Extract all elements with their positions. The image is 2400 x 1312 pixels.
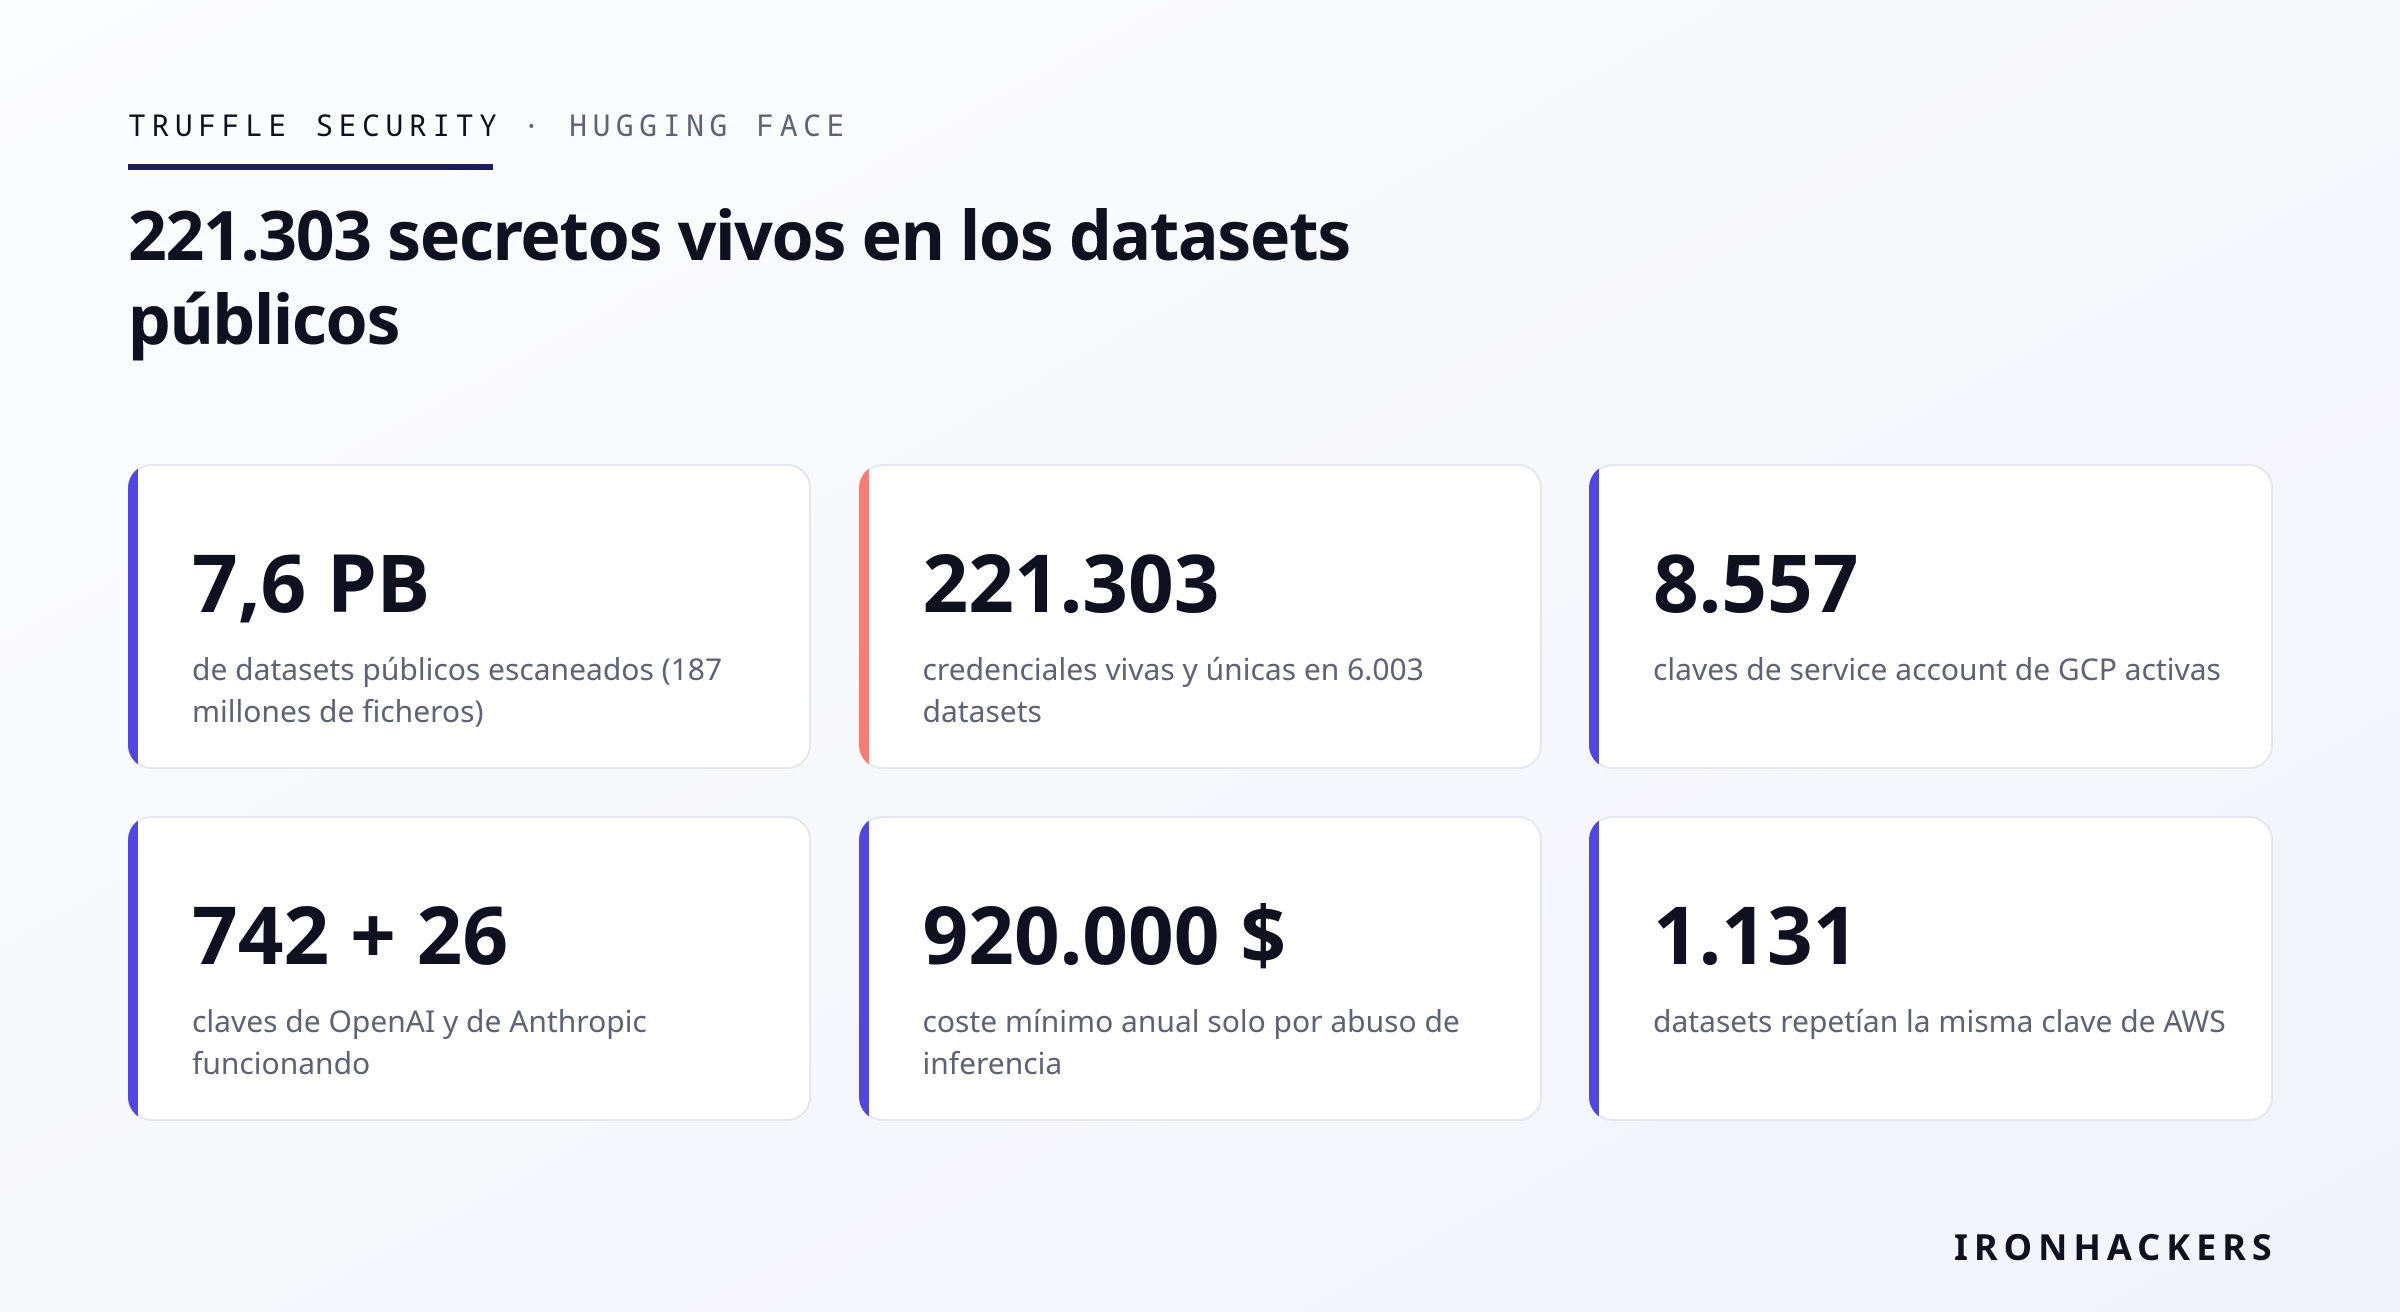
- stat number: 920.000 $: [922, 878, 1286, 988]
- panel: 920.000 $: [858, 816, 1542, 1120]
- title: 221.303 secretos vivos en los datasets públicos: [128, 187, 1350, 364]
- stat description: credenciales vivas y únicas en 6.003 datasets: [922, 648, 1424, 730]
- panel: 221.303: [858, 464, 1542, 768]
- brand wordmark: IRONHACKERS: [1954, 1222, 2278, 1271]
- panel: 742 + 26: [128, 816, 811, 1120]
- stat number: 221.303: [922, 526, 1220, 636]
- stat description: claves de OpenAI y de Anthropic funcionando: [192, 1000, 647, 1082]
- stat number: 7,6 PB: [192, 526, 430, 636]
- stat description: datasets repetían la misma clave de AWS: [1653, 1000, 2226, 1040]
- eyebrow: sources: TRUFFLE SECURITY · HUGGING FACE: [128, 104, 850, 144]
- stat description: coste mínimo anual solo por abuso de inferencia: [922, 1000, 1460, 1082]
- stat number: 742 + 26: [192, 878, 508, 988]
- panel: 1.131: [1589, 816, 2273, 1120]
- stat number: 1.131: [1653, 878, 1859, 988]
- panel: 7,6 PB: [128, 464, 811, 768]
- stat description: de datasets públicos escaneados (187 millones de ficheros): [192, 648, 722, 730]
- eyebrow underline: [128, 164, 493, 170]
- stat description: claves de service account de GCP activas: [1653, 648, 2221, 688]
- panel: 8.557: [1589, 464, 2273, 768]
- stat number: 8.557: [1653, 526, 1859, 636]
